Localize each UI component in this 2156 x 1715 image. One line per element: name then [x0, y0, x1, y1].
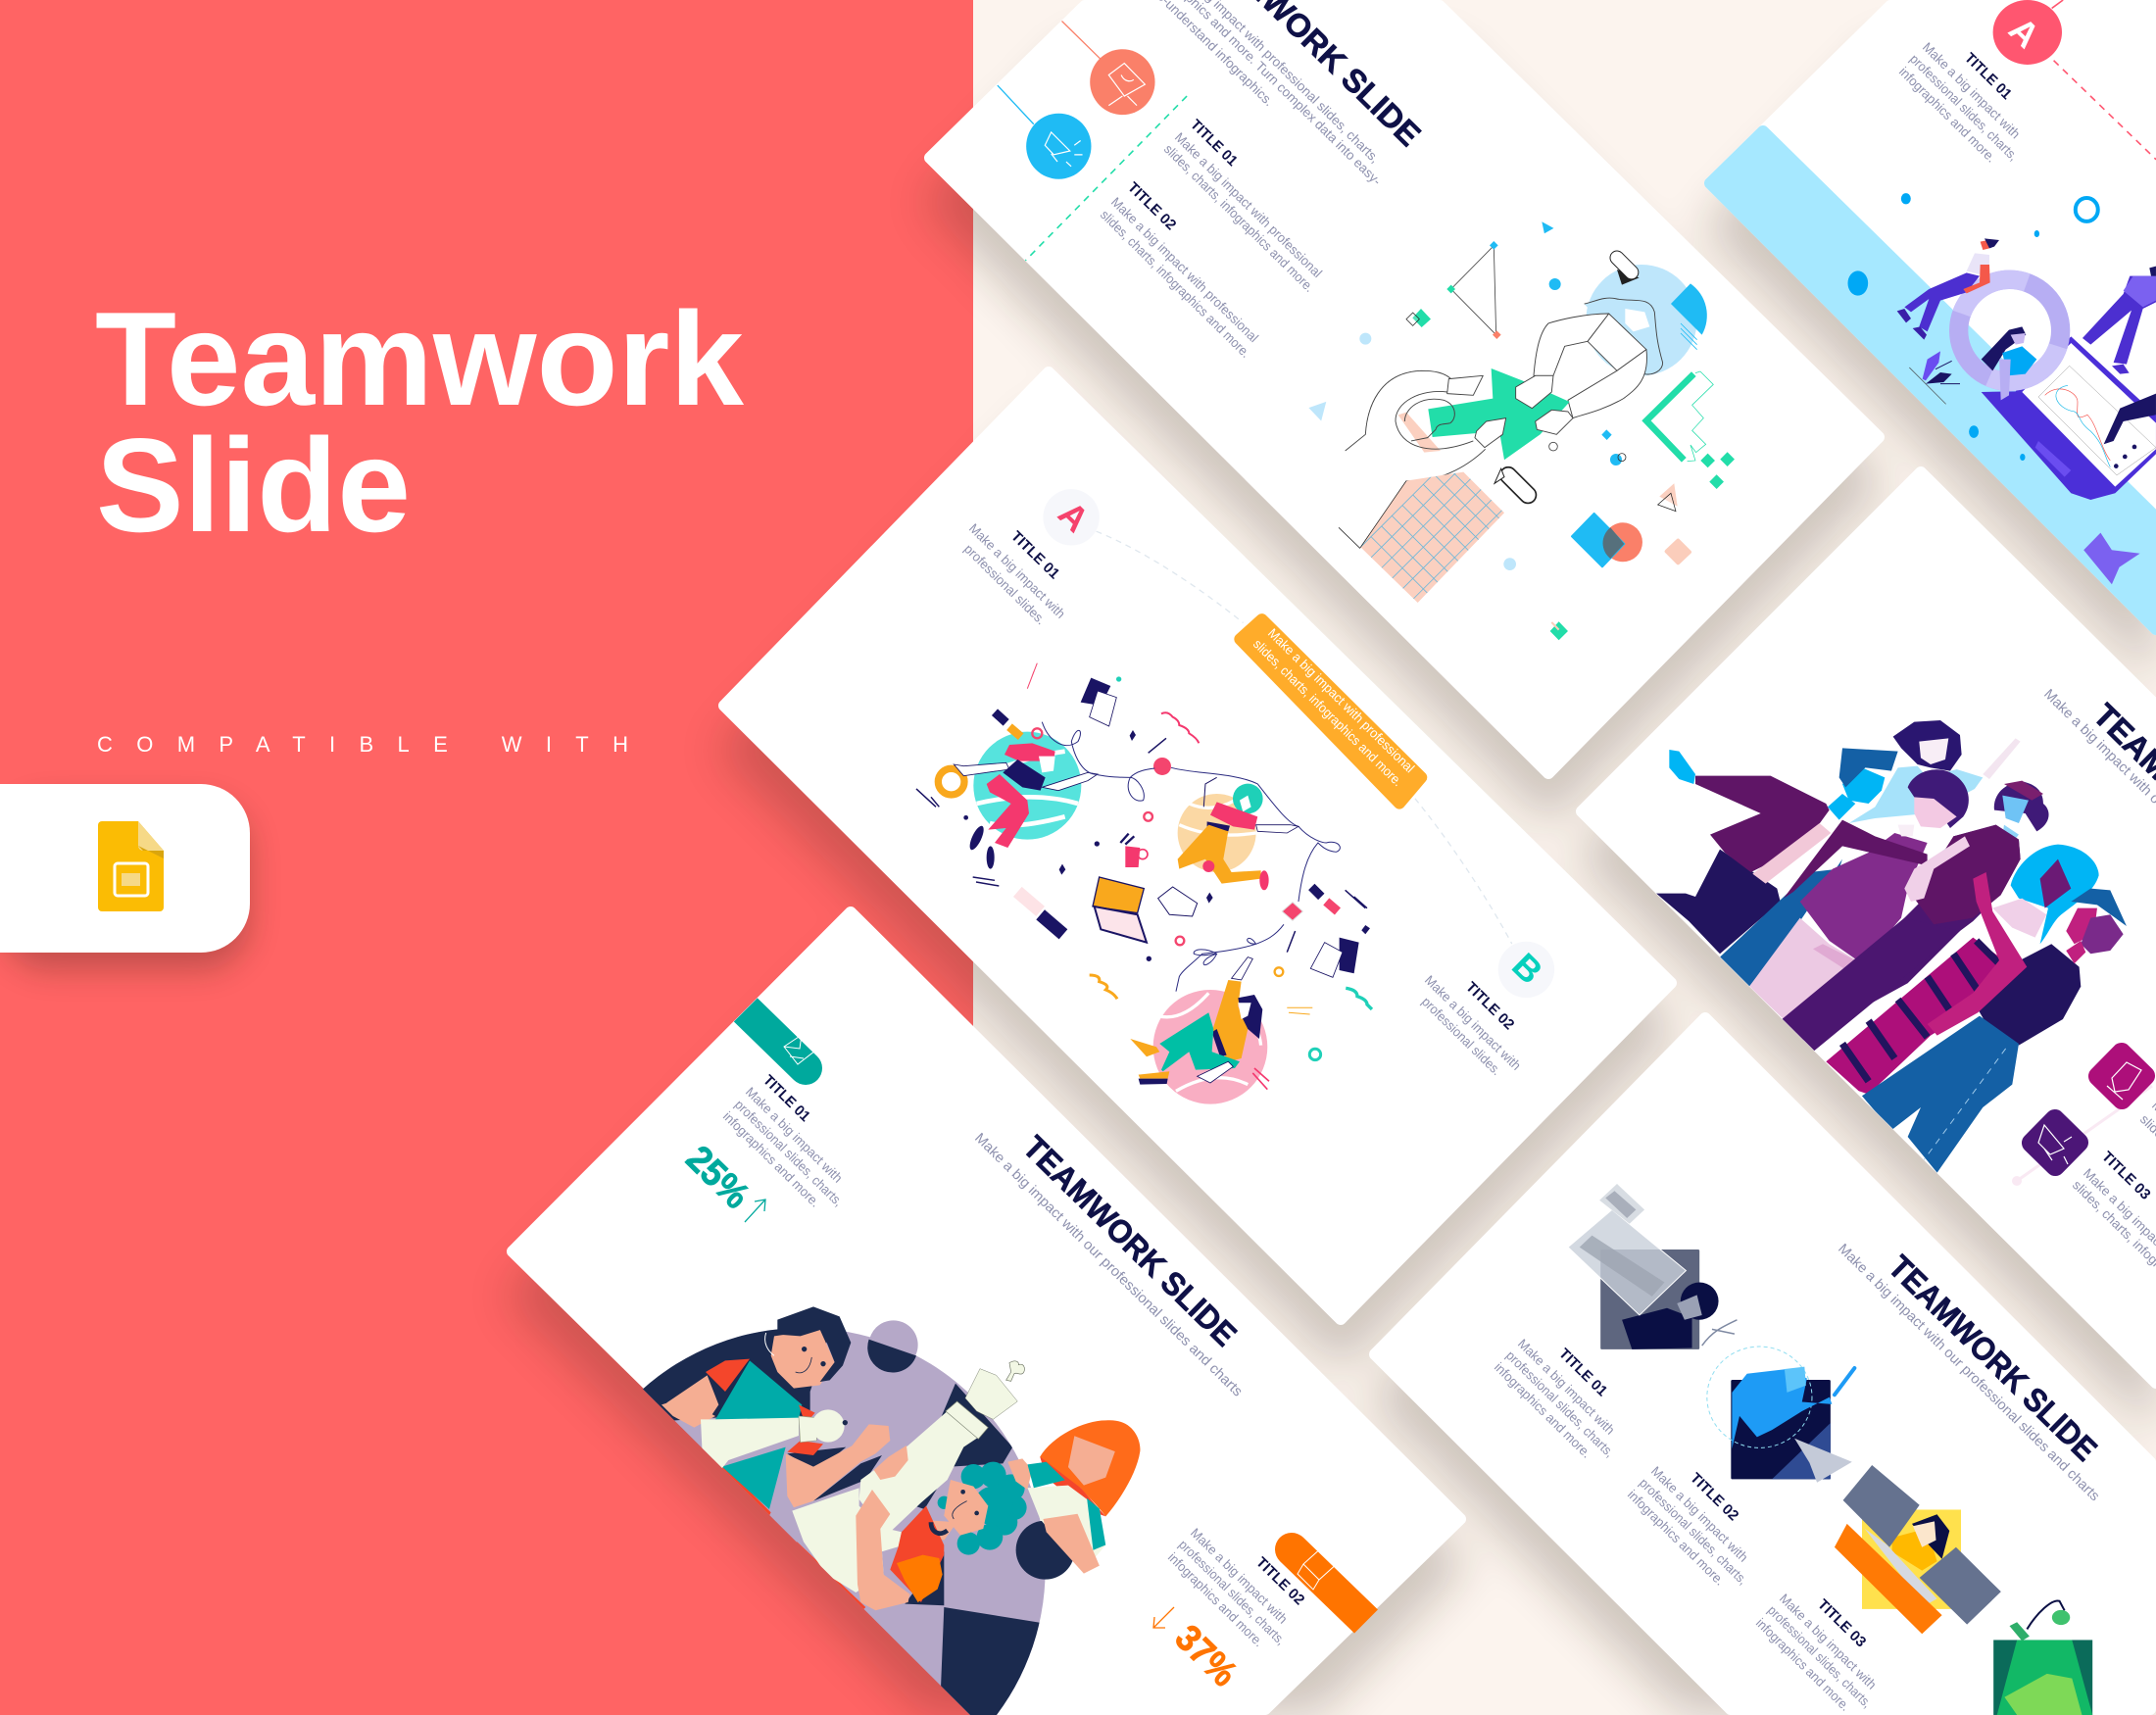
block: title 01: Make a big impact with	[1920, 39, 2023, 141]
block: title 01: TITLE 01	[1555, 1346, 1610, 1399]
block: title 02: TITLE 02	[1462, 979, 1517, 1033]
connector lines and icons	[998, 22, 1553, 421]
panel: star slide	[930, 0, 1879, 773]
block: title 01: Make a big impact with	[1515, 1336, 1618, 1438]
block: title 01: infographics and more.	[1896, 64, 1999, 166]
block: title 01: professional slides, charts,	[1503, 1348, 1617, 1460]
illustration: flyer	[1707, 1347, 1854, 1483]
heading: TEAMWORK SLIDE	[1882, 1249, 2104, 1468]
block: title 02: Make a big impact with professional	[1108, 194, 1261, 345]
badge B	[1498, 942, 1554, 998]
icon: laptop	[1297, 1550, 1335, 1591]
group of people illustration	[1656, 720, 2127, 1173]
stat: 37%: 37%	[1167, 1617, 1245, 1694]
panel: floating people slide	[724, 372, 1671, 1319]
block: title 01: TITLE 01	[1961, 50, 2015, 103]
block: title 02: infographics and more.	[1625, 1487, 1728, 1589]
block: title 03: TITLE 03	[2098, 1149, 2154, 1203]
badge A	[1993, 0, 2062, 65]
floating people illustration	[916, 663, 1372, 1104]
letter B: B	[1504, 945, 1550, 992]
blue band	[1710, 131, 2156, 629]
team illustration	[1897, 238, 2156, 500]
star illustration	[1339, 241, 1735, 655]
block: title 02: Make a big impact with	[1188, 1525, 1291, 1627]
heading: TEAMWORK SLIDE	[1016, 1129, 1244, 1353]
block: title 02: Make a big impact with	[1648, 1463, 1751, 1565]
callout text: slides, charts, infographics and more.	[1250, 636, 1405, 789]
block: title 01: TITLE 01	[760, 1072, 813, 1125]
block: title 01: infographics and more.	[1492, 1359, 1594, 1461]
icon: slides document	[98, 821, 164, 911]
icon: envelopes	[784, 1035, 815, 1064]
block: title 01: professional slides, charts,	[1907, 51, 2021, 164]
panel: chess slide	[513, 912, 1460, 1715]
title: Teamwork	[95, 284, 744, 433]
block: title 03: Make a big impact with	[1777, 1591, 1880, 1692]
title: Slide	[96, 411, 411, 560]
block: title 02: TITLE 02	[1687, 1470, 1741, 1524]
icon: presentation board	[1090, 49, 1155, 115]
block: title 02: TITLE 02	[1252, 1554, 1307, 1608]
orange tab	[1292, 1549, 1382, 1637]
compatible with label: COMPATIBLE WITH	[97, 732, 628, 757]
arrow: up	[745, 1200, 765, 1222]
block: title 02: Make a big impact with	[1422, 972, 1524, 1073]
block: title 01: slides, charts, infographics and more.	[1161, 141, 1317, 295]
block: title 02: TITLE 02	[1124, 179, 1179, 233]
block: title 02: infographics and more.	[1165, 1549, 1266, 1649]
badges and callout	[1043, 489, 1554, 998]
title	[95, 284, 744, 560]
badge A	[1043, 489, 1100, 546]
red-haired girl	[1028, 1420, 1140, 1574]
block: title 01: TITLE 01	[1007, 528, 1062, 582]
block: title 01: Make a big impact with professional	[1172, 129, 1325, 280]
panel: purple people slide	[1582, 472, 2156, 1383]
compatibility pill with slides icon	[0, 784, 250, 953]
icon: chess piece	[2084, 1039, 2156, 1113]
block: title 03: TITLE 03	[1814, 1596, 1869, 1650]
icon: megaphone	[2018, 1105, 2092, 1180]
letter A: A	[2001, 9, 2047, 56]
callout text: Make a big impact with professional	[1265, 625, 1417, 775]
illustration: lamp reader	[1993, 1600, 2092, 1715]
block: title 01: professional slides.	[961, 541, 1049, 627]
block: title 02: professional slides, charts,	[1637, 1475, 1750, 1588]
red panel	[0, 0, 973, 1715]
letter A: A	[1051, 493, 1097, 540]
subtitle: Make a big impact with our professional slides and charts	[971, 1130, 1246, 1399]
panel: blue band slide	[1710, 0, 2156, 629]
illustration: reader	[1568, 1184, 1737, 1349]
illustration: desk	[1835, 1465, 2001, 1634]
block: title 02: slides, charts, infographics and more.	[1098, 207, 1253, 361]
chess illustration	[562, 1294, 1075, 1715]
dots and connector	[1847, 0, 2156, 584]
block: title 02: professional slides.	[1419, 994, 1504, 1078]
workspace illustrations	[1568, 1184, 2092, 1715]
block: title 01	[720, 1072, 846, 1210]
callout banner	[1240, 619, 1421, 804]
block: title 01: infographics and more.	[720, 1108, 823, 1210]
block: title 01: Make a big impact with	[966, 520, 1068, 621]
block: title 01: professional slides, charts,	[732, 1097, 846, 1209]
arrow: down	[1153, 1607, 1174, 1628]
block: title 02: professional slides, charts,	[1176, 1537, 1289, 1647]
block: title 01: TITLE 01	[1187, 117, 1241, 170]
block: title 01: Make a big impact with	[743, 1084, 846, 1186]
teal tab	[730, 995, 806, 1068]
panel: workspace slide	[1375, 1018, 2150, 1715]
stat: 25%: 25%	[678, 1138, 757, 1217]
icon: megaphone	[1026, 114, 1091, 179]
subtitle: Make a big impact with our professional slides and charts	[1835, 1241, 2102, 1504]
